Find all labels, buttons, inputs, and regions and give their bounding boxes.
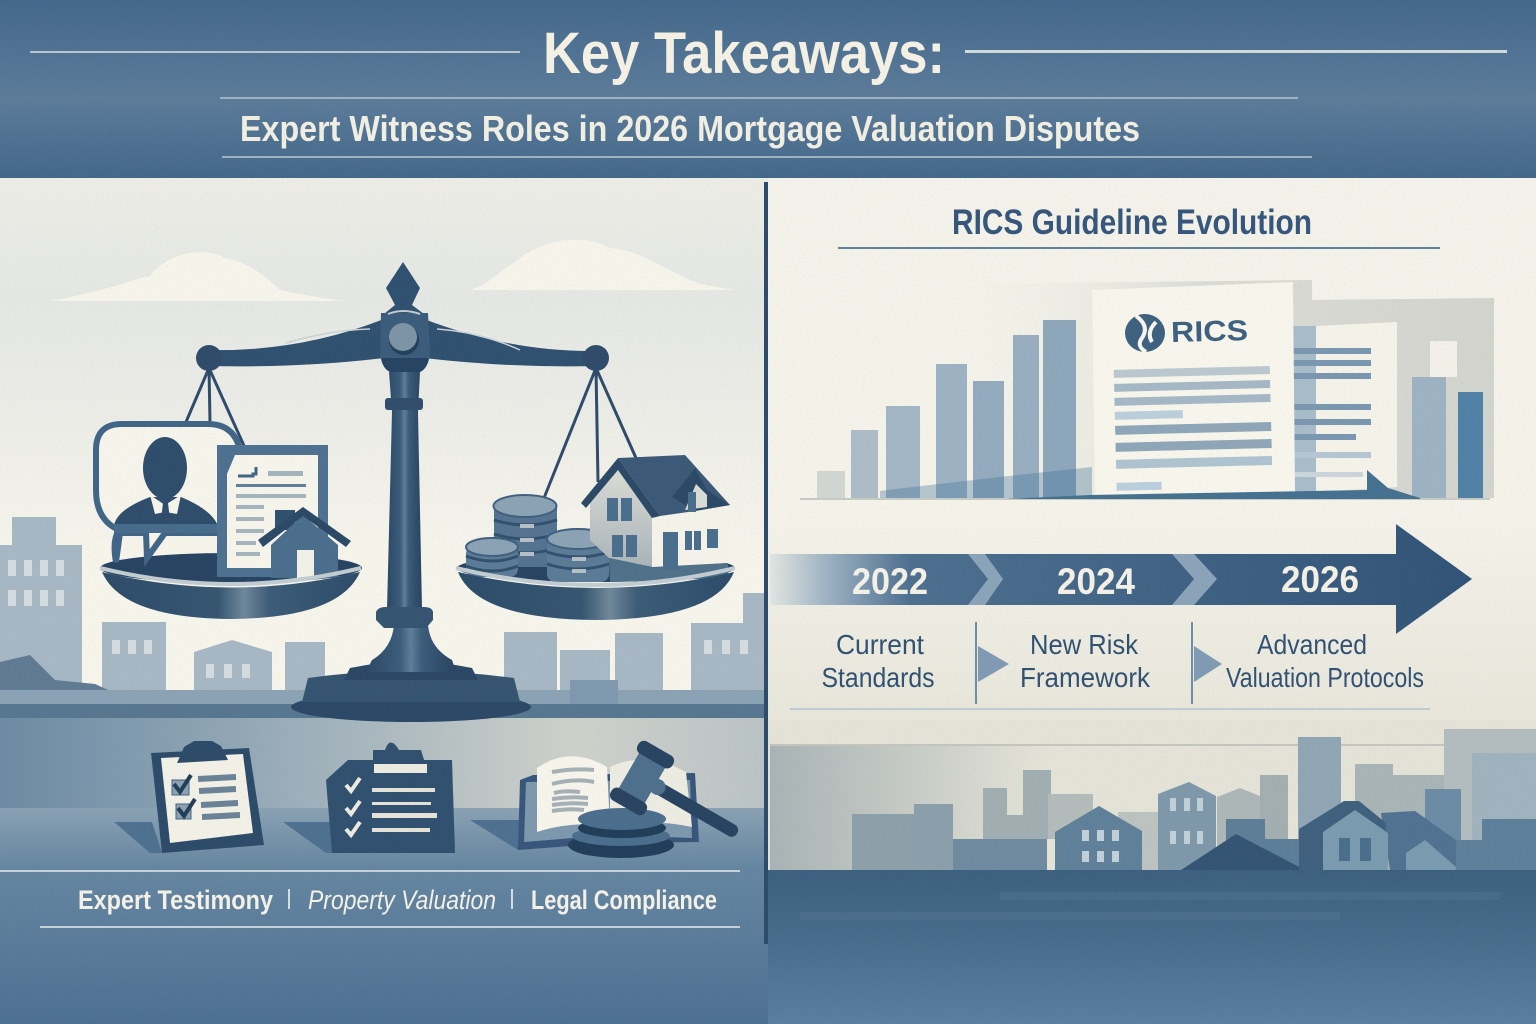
left pan [102,572,360,619]
coins [466,495,609,582]
title: Key Takeaways: [543,21,945,86]
timeline labels [790,622,1430,710]
document lines [1114,366,1273,491]
speech bubble [96,424,240,562]
scale base [291,625,531,722]
RICS documents [1005,282,1420,499]
subtitle: Expert Witness Roles in 2026 Mortgage Valuation Disputes [240,108,1140,149]
New Risk Framework: Framework [1020,662,1151,693]
Current Standards: Current [836,629,924,660]
vertical divider [764,182,768,944]
scale beam [209,319,384,366]
bar chart [800,320,1490,500]
Current Standards: Standards [822,662,934,693]
left pan contents [96,424,362,619]
document base [1005,470,1420,499]
document [217,445,328,577]
Property Valuation: Property Valuation [308,885,496,915]
scale [186,262,636,722]
2022: 2022 [852,561,928,602]
Advanced Valuation Protocols: Advanced [1257,629,1367,660]
right pan back [457,554,735,582]
RICS logo: RICS [1171,315,1248,349]
icon shadows [114,820,520,853]
clouds [50,240,735,301]
left pan back [100,553,362,583]
Advanced Valuation Protocols: Valuation Protocols [1226,662,1424,693]
small house [258,507,351,578]
scale column [387,372,422,610]
skyline: left [0,517,768,718]
header band [0,0,1536,178]
chains [186,368,636,498]
2026: 2026 [1281,559,1359,600]
icon: clipboard checklist [151,741,264,853]
timeline arrow [770,524,1472,634]
New Risk Framework: New Risk [1030,629,1139,660]
house [581,455,730,582]
chevrons [968,554,1003,605]
bottom label strip [0,870,740,928]
icon: checklist board [326,742,455,853]
back document [1293,322,1397,492]
beam ends [196,345,222,371]
marker [978,646,1009,682]
marker [1194,646,1222,682]
right panel heading: RICS Guideline Evolution [952,203,1312,242]
finial [384,262,424,314]
2024: 2024 [1057,561,1135,602]
right pan contents [456,455,735,620]
RICS logo [1125,314,1248,352]
skyline: right [852,729,1536,870]
person icon [114,437,218,533]
Legal Compliance: Legal Compliance [531,885,717,915]
right pan [458,572,734,620]
grey backdrop [960,280,1494,498]
bottom icons [114,739,754,862]
front document [1092,282,1295,495]
icon: law book and gavel [518,739,754,862]
Expert Testimony: Expert Testimony [78,885,273,915]
